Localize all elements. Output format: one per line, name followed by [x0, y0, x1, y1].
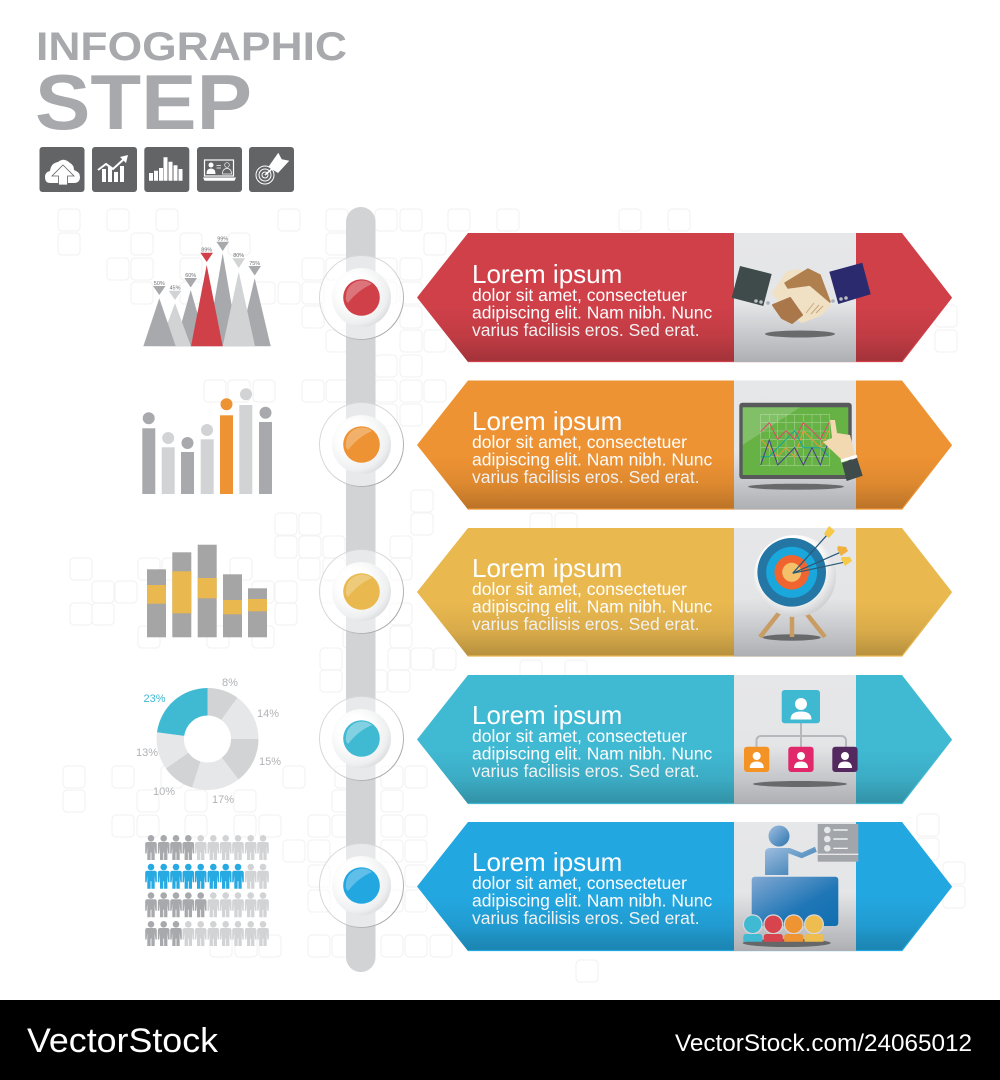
stacked bar chart	[147, 545, 267, 637]
mountain chart	[143, 236, 271, 346]
background pattern	[58, 209, 965, 982]
panel: step 1 red: varius facilisis eros. Sed erat.	[472, 320, 700, 340]
panel: step 5 blue: adipiscing elit. Nam nibh. Nunc	[472, 890, 713, 910]
panel: step 5 blue: Lorem ipsum	[472, 847, 622, 877]
icon: target with arrow	[249, 147, 294, 192]
panel: step 1 red: adipiscing elit. Nam nibh. Nunc	[472, 302, 713, 322]
panel: step 2 orange: dolor sit amet, consectetuer	[472, 432, 687, 452]
panel: step 5 blue: dolor sit amet, consectetuer	[472, 873, 687, 893]
donut chart: 13%	[136, 747, 158, 759]
icon: bar graph	[144, 147, 189, 192]
panel: step 5 blue: varius facilisis eros. Sed erat.	[472, 908, 700, 928]
icon: teacher presenting	[743, 824, 858, 947]
title	[35, 25, 347, 146]
donut chart: 10%	[153, 786, 175, 798]
icon: laptop video call	[197, 147, 242, 192]
panel: step 3 yellow: Lorem ipsum	[472, 553, 622, 583]
icon: growth chart	[92, 147, 137, 192]
timeline knob: red	[320, 256, 404, 340]
timeline bar	[346, 207, 376, 972]
panel: step 2 orange: varius facilisis eros. Sed erat.	[472, 467, 700, 487]
panel: step 2 orange	[417, 380, 952, 510]
icon row	[40, 147, 294, 192]
panel: step 4 teal: varius facilisis eros. Sed erat.	[472, 761, 700, 781]
timeline knob: blue	[320, 844, 404, 928]
mountain chart: 99%	[217, 236, 228, 242]
panel: step 4 teal: Lorem ipsum	[472, 700, 622, 730]
mountain chart: 50%	[154, 281, 165, 287]
icon: handshake	[732, 263, 871, 338]
donut chart: 15%	[259, 756, 281, 768]
timeline knob: orange	[320, 402, 404, 486]
panel: step 1 red: Lorem ipsum	[472, 259, 622, 289]
footer brand: VectorStock	[27, 1022, 219, 1060]
mountain chart: 80%	[233, 253, 244, 259]
bar chart with bubbles	[142, 388, 272, 494]
donut chart: 8%	[222, 677, 238, 689]
icon: target with arrows	[754, 526, 852, 641]
timeline knob: yellow	[320, 550, 404, 634]
people pictogram	[145, 835, 269, 946]
footer bar	[0, 1000, 1000, 1080]
donut chart: 23%	[144, 693, 166, 705]
panel: step 1 red	[417, 233, 952, 362]
icon: org chart	[744, 690, 858, 787]
panel: step 3 yellow: dolor sit amet, consectetuer	[472, 579, 687, 599]
panel: step 4 teal: dolor sit amet, consectetuer	[472, 726, 687, 746]
panel: step 4 teal	[417, 675, 952, 804]
title: STEP	[35, 58, 252, 146]
icon: tablet with chart	[739, 403, 863, 490]
donut chart: 17%	[212, 794, 234, 806]
timeline knob: teal	[320, 696, 404, 780]
panel: step 2 orange: Lorem ipsum	[472, 406, 622, 436]
panel: step 3 yellow: adipiscing elit. Nam nibh. Nunc	[472, 596, 713, 616]
donut chart	[136, 677, 281, 806]
icon: cloud upload	[40, 147, 84, 192]
panel: step 5 blue	[417, 822, 952, 951]
panel: step 4 teal: adipiscing elit. Nam nibh. Nunc	[472, 744, 713, 764]
footer image id: VectorStock.com/24065012	[675, 1030, 972, 1057]
panel: step 3 yellow: varius facilisis eros. Sed erat.	[472, 614, 700, 634]
panel: step 2 orange: adipiscing elit. Nam nibh. Nunc	[472, 450, 713, 470]
mountain chart: 75%	[249, 261, 260, 267]
mountain chart: 89%	[201, 248, 212, 254]
title: INFOGRAPHIC	[36, 25, 347, 69]
mountain chart: 60%	[185, 273, 196, 279]
panel: step 3 yellow	[417, 526, 952, 656]
mountain chart: 45%	[169, 286, 181, 292]
donut chart: 14%	[257, 708, 279, 720]
panel: step 1 red: dolor sit amet, consectetuer	[472, 285, 687, 305]
